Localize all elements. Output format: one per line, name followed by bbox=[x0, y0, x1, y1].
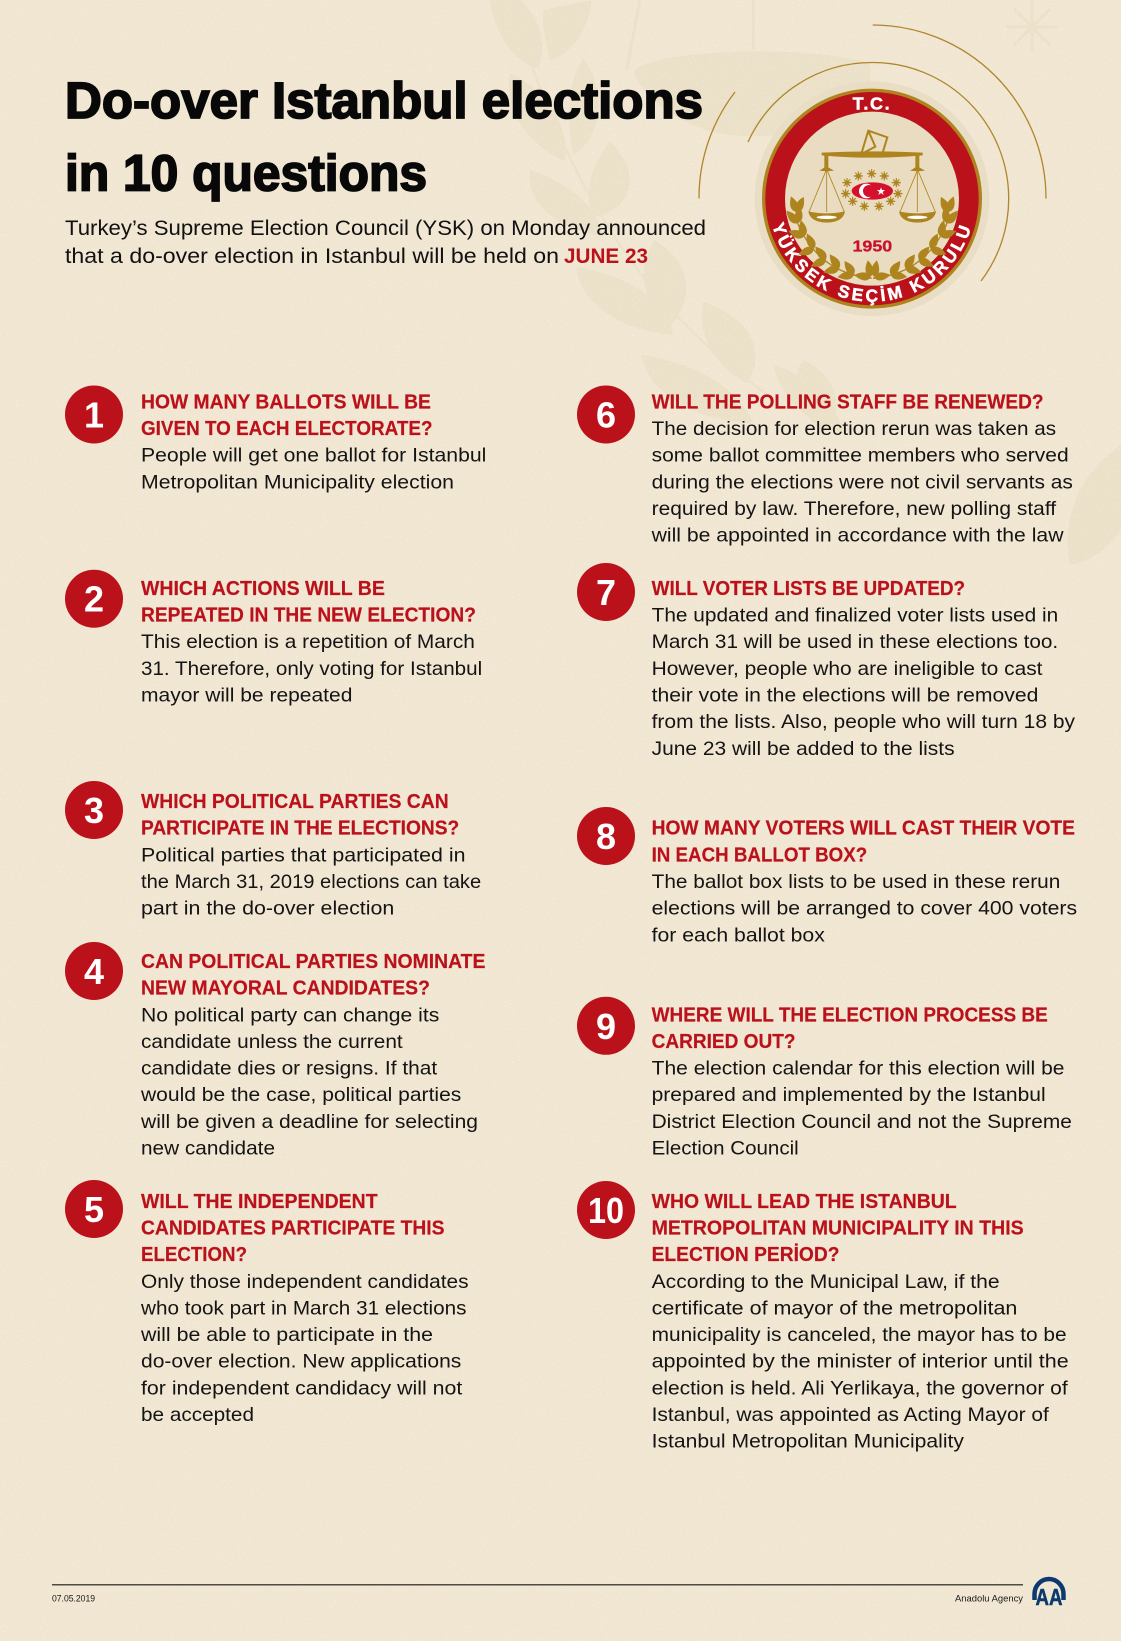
number badge 1: 1 bbox=[84, 394, 104, 436]
number badge 6: 6 bbox=[596, 394, 616, 436]
question 1 answer bbox=[141, 445, 486, 493]
number badge 7 bbox=[577, 563, 635, 621]
number badge 5: 5 bbox=[84, 1189, 104, 1230]
question 3 answer: part in the do-over election bbox=[141, 898, 394, 920]
question 10 heading: ELECTION PERİOD? bbox=[652, 1243, 840, 1266]
question 8 heading bbox=[652, 817, 1075, 866]
logo: Anadolu Agency: AA bbox=[1036, 1584, 1062, 1610]
question 9 answer: District Election Council and not the Supreme bbox=[652, 1111, 1072, 1133]
question 8 bbox=[577, 807, 1077, 946]
question 2 heading: REPEATED IN THE NEW ELECTION? bbox=[141, 604, 476, 626]
question 7 answer: June 23 will be added to the lists bbox=[652, 738, 955, 760]
question 8 answer bbox=[652, 871, 1077, 946]
icon: laurel wreath bbox=[784, 195, 961, 281]
question 1 heading: GIVEN TO EACH ELECTORATE? bbox=[141, 417, 432, 440]
question 6 answer: some ballot committee members who served bbox=[652, 445, 1069, 467]
question 5 answer: who took part in March 31 elections bbox=[140, 1297, 467, 1319]
number badge 4: 4 bbox=[84, 951, 104, 992]
date: 07.05.2019 bbox=[52, 1594, 95, 1604]
question 5 answer bbox=[140, 1271, 469, 1426]
question 6 answer: will be appointed in accordance with the law bbox=[651, 525, 1064, 547]
question 7 answer: However, people who are ineligible to cast bbox=[652, 658, 1043, 680]
question 8 answer: The ballot box lists to be used in these rerun bbox=[652, 871, 1060, 893]
question 10 answer: election is held. Ali Yerlikaya, the governor of bbox=[652, 1377, 1068, 1399]
question 6 answer: The decision for election rerun was taken as bbox=[652, 418, 1056, 440]
question 6 answer: required by law. Therefore, new polling staff bbox=[652, 498, 1057, 520]
number badge 10: 10 bbox=[588, 1190, 624, 1231]
number badge 9 bbox=[577, 997, 635, 1055]
question 7 answer bbox=[652, 604, 1075, 760]
number badge 5 bbox=[65, 1180, 123, 1238]
source credit: Anadolu Agency bbox=[955, 1594, 1024, 1604]
question 3 heading: PARTICIPATE IN THE ELECTIONS? bbox=[141, 817, 459, 840]
question 2 heading bbox=[141, 577, 476, 626]
question 4 answer: No political party can change its bbox=[141, 1004, 440, 1026]
subtitle: Turkey’s Supreme Election Council (YSK) on Monday announced bbox=[65, 217, 706, 240]
question 10 bbox=[577, 1181, 1069, 1453]
question 7 heading: WILL VOTER LISTS BE UPDATED? bbox=[652, 577, 965, 600]
icon: eleven stars bbox=[841, 169, 903, 211]
question 2 answer: mayor will be repeated bbox=[141, 684, 352, 706]
question 10 answer: municipality is canceled, the mayor has to be bbox=[652, 1324, 1067, 1346]
question 9 answer: Election Council bbox=[652, 1138, 799, 1160]
question 1 answer: People will get one ballot for Istanbul bbox=[141, 445, 486, 467]
title: Do-over Istanbul elections bbox=[65, 72, 703, 129]
title: in 10 questions bbox=[65, 144, 427, 202]
question 5 answer: be accepted bbox=[141, 1404, 254, 1426]
question 5 bbox=[65, 1180, 469, 1426]
number badge 1 bbox=[65, 386, 123, 444]
subtitle bbox=[65, 217, 706, 268]
question 6 answer bbox=[651, 418, 1073, 547]
question 7 answer: from the lists. Also, people who will turn 18 by bbox=[652, 711, 1075, 733]
number badge 7: 7 bbox=[596, 572, 616, 613]
question 2 answer: 31. Therefore, only voting for Istanbul bbox=[141, 658, 482, 680]
subtitle: that a do-over election in Istanbul will be held on bbox=[65, 245, 559, 268]
question 3 answer: Political parties that participated in bbox=[141, 844, 466, 866]
question 4 answer bbox=[140, 1004, 478, 1160]
question 4 answer: candidate dies or resigns. If that bbox=[141, 1058, 438, 1080]
number badge 6 bbox=[577, 386, 635, 444]
question 10 answer: Istanbul Metropolitan Municipality bbox=[652, 1431, 964, 1453]
question 10 heading: METROPOLITAN MUNICIPALITY IN THIS bbox=[652, 1216, 1024, 1240]
icon: crescent and star oval bbox=[852, 182, 893, 200]
question 4 heading: NEW MAYORAL CANDIDATES? bbox=[141, 977, 430, 1000]
question 10 heading bbox=[652, 1190, 1024, 1266]
icon: scales of justice bbox=[808, 151, 936, 223]
question 10 answer: certificate of mayor of the metropolitan bbox=[652, 1297, 1017, 1319]
question 2 answer: This election is a repetition of March bbox=[141, 631, 475, 653]
question 7 answer: March 31 will be used in these elections too. bbox=[652, 631, 1058, 653]
number badge 3 bbox=[65, 781, 123, 839]
question 4 answer: will be given a deadline for selecting bbox=[140, 1111, 478, 1133]
question 4 answer: would be the case, political parties bbox=[140, 1084, 462, 1106]
question 8 heading: IN EACH BALLOT BOX? bbox=[652, 843, 867, 866]
emblem ring text: T.C.: T.C. bbox=[853, 93, 891, 113]
question 6 bbox=[577, 386, 1073, 547]
question 9 bbox=[577, 997, 1072, 1160]
question 3 answer: the March 31, 2019 elections can take bbox=[141, 871, 481, 893]
question 5 heading: WILL THE INDEPENDENT bbox=[141, 1190, 378, 1213]
number badge 8: 8 bbox=[596, 816, 616, 857]
question 1 heading: HOW MANY BALLOTS WILL BE bbox=[141, 390, 431, 413]
founding year: 1950 bbox=[852, 239, 892, 256]
question 9 answer bbox=[652, 1058, 1072, 1160]
question 8 answer: for each ballot box bbox=[652, 924, 825, 946]
question 8 answer: elections will be arranged to cover 400 voters bbox=[652, 898, 1077, 920]
question 10 answer: appointed by the minister of interior until the bbox=[652, 1351, 1069, 1373]
subtitle: JUNE 23 bbox=[564, 245, 648, 268]
question 1 answer: Metropolitan Municipality election bbox=[141, 471, 454, 493]
question 3 answer bbox=[141, 844, 481, 920]
question 7 answer: their vote in the elections will be removed bbox=[652, 684, 1038, 706]
question 7 bbox=[577, 563, 1075, 760]
question 5 answer: for independent candidacy will not bbox=[141, 1377, 463, 1399]
icon: ballot envelope bbox=[862, 131, 887, 153]
emblem ring text: Yuksek Secim Kurulu: YÜKSEK SEÇİM KURULU bbox=[773, 221, 970, 306]
question 2 bbox=[65, 570, 482, 706]
question 1 bbox=[65, 386, 486, 493]
question 4 answer: new candidate bbox=[141, 1138, 275, 1160]
question 4 heading: CAN POLITICAL PARTIES NOMINATE bbox=[141, 950, 485, 973]
question 9 answer: prepared and implemented by the Istanbul bbox=[652, 1084, 1046, 1106]
number badge 8 bbox=[577, 807, 635, 865]
question 2 heading: WHICH ACTIONS WILL BE bbox=[141, 577, 385, 600]
number badge 3: 3 bbox=[84, 790, 104, 831]
question 10 answer: According to the Municipal Law, if the bbox=[652, 1271, 1000, 1293]
footer bbox=[52, 1579, 1064, 1610]
question 5 answer: will be able to participate in the bbox=[140, 1324, 433, 1346]
decorative gold arcs around emblem bbox=[699, 25, 1046, 281]
number badge 10 bbox=[577, 1181, 635, 1239]
number badge 2: 2 bbox=[84, 579, 104, 620]
question 4 answer: candidate unless the current bbox=[141, 1031, 403, 1053]
number badge 9: 9 bbox=[596, 1006, 616, 1047]
question 5 answer: do-over election. New applications bbox=[141, 1351, 462, 1373]
question 2 answer bbox=[141, 631, 482, 706]
question 9 heading bbox=[652, 1003, 1048, 1053]
question 7 answer: The updated and finalized voter lists used in bbox=[652, 604, 1058, 626]
question 6 heading: WILL THE POLLING STAFF BE RENEWED? bbox=[652, 390, 1044, 413]
question 5 heading: ELECTION? bbox=[141, 1243, 247, 1266]
question 4 bbox=[65, 942, 485, 1160]
question 1 heading bbox=[141, 390, 432, 440]
question 3 bbox=[65, 781, 481, 920]
number badge 2 bbox=[65, 570, 123, 628]
question 4 heading bbox=[141, 950, 485, 1000]
question 5 heading bbox=[141, 1190, 444, 1266]
question 9 answer: The election calendar for this election will be bbox=[652, 1058, 1064, 1080]
question 3 heading: WHICH POLITICAL PARTIES CAN bbox=[141, 790, 449, 813]
number badge 4 bbox=[65, 942, 123, 1000]
question 5 answer: Only those independent candidates bbox=[141, 1271, 469, 1293]
question 10 heading: WHO WILL LEAD THE ISTANBUL bbox=[652, 1190, 957, 1213]
question 10 answer: Istanbul, was appointed as Acting Mayor of bbox=[652, 1404, 1049, 1426]
emblem: Supreme Election Council seal bbox=[754, 82, 990, 316]
question 6 answer: during the elections were not civil servants as bbox=[652, 471, 1073, 493]
question 9 heading: WHERE WILL THE ELECTION PROCESS BE bbox=[652, 1003, 1048, 1026]
question 9 heading: CARRIED OUT? bbox=[652, 1030, 796, 1053]
question 5 heading: CANDIDATES PARTICIPATE THIS bbox=[141, 1216, 444, 1240]
question 8 heading: HOW MANY VOTERS WILL CAST THEIR VOTE bbox=[652, 817, 1075, 840]
title bbox=[65, 72, 703, 202]
question 10 answer bbox=[652, 1271, 1069, 1453]
question 3 heading bbox=[141, 790, 459, 840]
